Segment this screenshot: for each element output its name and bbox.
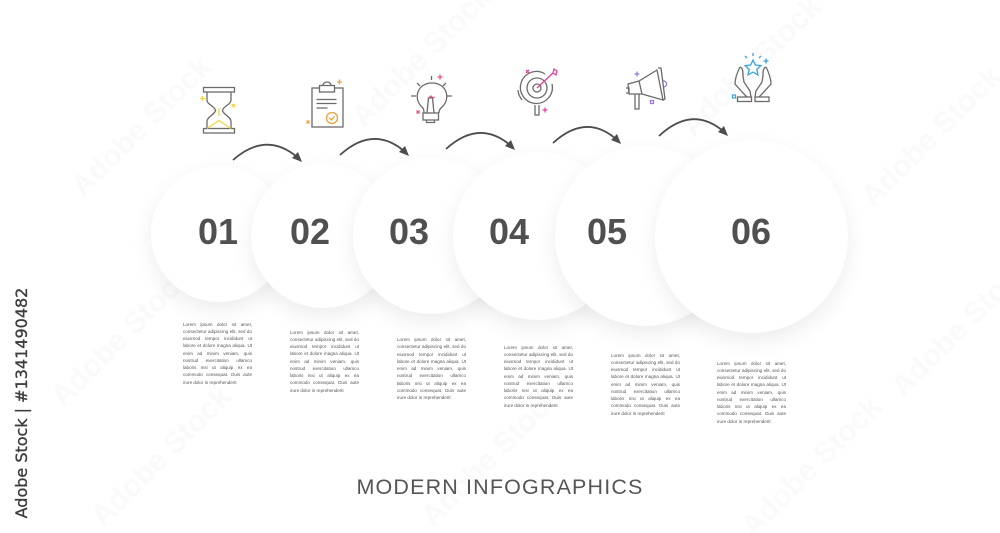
text block 2: irure dolor in reprehenderit bbox=[290, 388, 344, 392]
text block 4: Lorem ipsum dolor sit amet, bbox=[504, 344, 573, 350]
text block 5: irure dolor in reprehenderit bbox=[611, 410, 665, 416]
icon: target bbox=[518, 69, 557, 115]
text block 6 bbox=[717, 360, 786, 424]
side stock label: Adobe Stock | #1341490482 bbox=[12, 288, 31, 518]
circle 04 bbox=[453, 152, 621, 320]
text block 5: consectetur adipiscing elit, sed do bbox=[611, 360, 680, 365]
text block 6: eiusmod tempor incididunt ut bbox=[717, 375, 786, 380]
text block 1: consectetur adipiscing elit, sed do bbox=[183, 329, 252, 334]
text block 2: eiusmod tempor incididunt ut bbox=[290, 344, 359, 349]
text block 3: nostrud exercitation ullamco bbox=[397, 373, 466, 378]
text block 2: laboris nisi ut aliquip ex ea bbox=[290, 373, 359, 378]
text block 5: laboris nisi ut aliquip ex ea bbox=[611, 396, 680, 401]
background watermark: Adobe Stock bbox=[45, 260, 198, 413]
text block 1: nostrud exercitation ullamco bbox=[183, 358, 252, 363]
text block 4: commodo consequat. Duis aute bbox=[504, 395, 573, 400]
text block 1: irure dolor in reprehenderit bbox=[183, 380, 237, 384]
text block 3 bbox=[397, 337, 466, 400]
text block 6: commodo consequat. Duis aute bbox=[717, 411, 786, 416]
text block 6: nostrud exercitation ullamco bbox=[717, 397, 786, 402]
icon: light bulb bbox=[411, 74, 452, 122]
text block 3: commodo consequat. Duis aute bbox=[397, 388, 466, 393]
text block 6: irure dolor in reprehenderit bbox=[717, 418, 771, 424]
text block 6: Lorem ipsum dolor sit amet, bbox=[717, 360, 786, 366]
text block 6: consectetur adipiscing elit, sed do bbox=[717, 368, 786, 373]
number 01: 01 bbox=[198, 211, 238, 252]
arrow 3 bbox=[446, 133, 515, 150]
background watermark: Adobe Stock bbox=[85, 380, 238, 533]
text block 5: nostrud exercitation ullamco bbox=[611, 389, 680, 394]
number 04: 04 bbox=[489, 211, 529, 252]
text block 1: Lorem ipsum dolor sit amet, bbox=[183, 322, 252, 326]
text block 2: consectetur adipiscing elit, sed do bbox=[290, 337, 359, 342]
circle 01 bbox=[151, 166, 287, 302]
circle 03 bbox=[353, 158, 509, 314]
text block 2: nostrud exercitation ullamco bbox=[290, 366, 359, 371]
text block 3: labore et dolore magna aliqua. Ut bbox=[397, 359, 466, 364]
text block 2: enim ad minim veniam, quis bbox=[290, 358, 359, 364]
icon: hands and star bbox=[732, 53, 771, 102]
number 02: 02 bbox=[290, 211, 330, 252]
text block 5: commodo consequat. Duis aute bbox=[611, 403, 680, 408]
text block 3: irure dolor in reprehenderit bbox=[397, 395, 451, 400]
arrow 2 bbox=[340, 139, 409, 156]
text block 5: enim ad minim veniam, quis bbox=[611, 382, 680, 386]
number 05: 05 bbox=[587, 211, 627, 252]
number 06: 06 bbox=[731, 211, 771, 252]
text block 1: labore et dolore magna aliqua. Ut bbox=[183, 343, 252, 348]
arrow 4 bbox=[553, 127, 621, 144]
text block 4: nostrud exercitation ullamco bbox=[504, 381, 573, 386]
text block 4: labore et dolore magna aliqua. Ut bbox=[504, 366, 573, 371]
text block 5: eiusmod tempor incididunt ut bbox=[611, 367, 680, 372]
text block 2: Lorem ipsum dolor sit amet, bbox=[290, 330, 359, 334]
text block 3: laboris nisi ut aliquip ex ea bbox=[397, 380, 466, 386]
text block 3: enim ad minim veniam, quis bbox=[397, 366, 466, 371]
text block 5: labore et dolore magna aliqua. Ut bbox=[611, 374, 680, 379]
text block 3: Lorem ipsum dolor sit amet, bbox=[397, 337, 466, 342]
text block 5: Lorem ipsum dolor sit amet, bbox=[611, 352, 680, 358]
text block 6: laboris nisi ut aliquip ex ea bbox=[717, 404, 786, 409]
icon: megaphone bbox=[626, 68, 667, 109]
text block 4: consectetur adipiscing elit, sed do bbox=[504, 352, 573, 357]
arrow 5 bbox=[659, 119, 728, 136]
text block 2: commodo consequat. Duis aute bbox=[290, 380, 359, 385]
text block 5 bbox=[611, 352, 680, 416]
text block 1: enim ad minim veniam, quis bbox=[183, 350, 252, 356]
text block 1: commodo consequat. Duis aute bbox=[183, 372, 252, 377]
icon: clipboard bbox=[306, 80, 343, 127]
arrow 1 bbox=[233, 145, 302, 162]
text block 2: labore et dolore magna aliqua. Ut bbox=[290, 351, 359, 356]
circle 05 bbox=[555, 146, 735, 326]
background watermark: Adobe Stock bbox=[415, 380, 568, 533]
text block 3: consectetur adipiscing elit, sed do bbox=[397, 344, 466, 349]
background watermark: Adobe Stock bbox=[65, 50, 218, 203]
text block 1: eiusmod tempor incididunt ut bbox=[183, 336, 252, 341]
circle 06 bbox=[655, 140, 848, 333]
text block 4: irure dolor in reprehenderit bbox=[504, 402, 558, 408]
text block 1: laboris nisi ut aliquip ex ea bbox=[183, 365, 252, 370]
icon: hourglass bbox=[200, 88, 235, 133]
text block 2 bbox=[290, 330, 359, 393]
title: MODERN INFOGRAPHICS bbox=[356, 475, 644, 499]
text block 4: enim ad minim veniam, quis bbox=[504, 374, 573, 378]
text block 4: laboris nisi ut aliquip ex ea bbox=[504, 388, 573, 393]
text block 4 bbox=[504, 344, 573, 408]
text block 4: eiusmod tempor incididunt ut bbox=[504, 359, 573, 364]
text block 6: enim ad minim veniam, quis bbox=[717, 390, 786, 394]
text block 1 bbox=[183, 322, 252, 385]
text block 6: labore et dolore magna aliqua. Ut bbox=[717, 382, 786, 387]
number 03: 03 bbox=[389, 211, 429, 252]
text block 3: eiusmod tempor incididunt ut bbox=[397, 352, 466, 356]
circle 02 bbox=[251, 164, 395, 308]
